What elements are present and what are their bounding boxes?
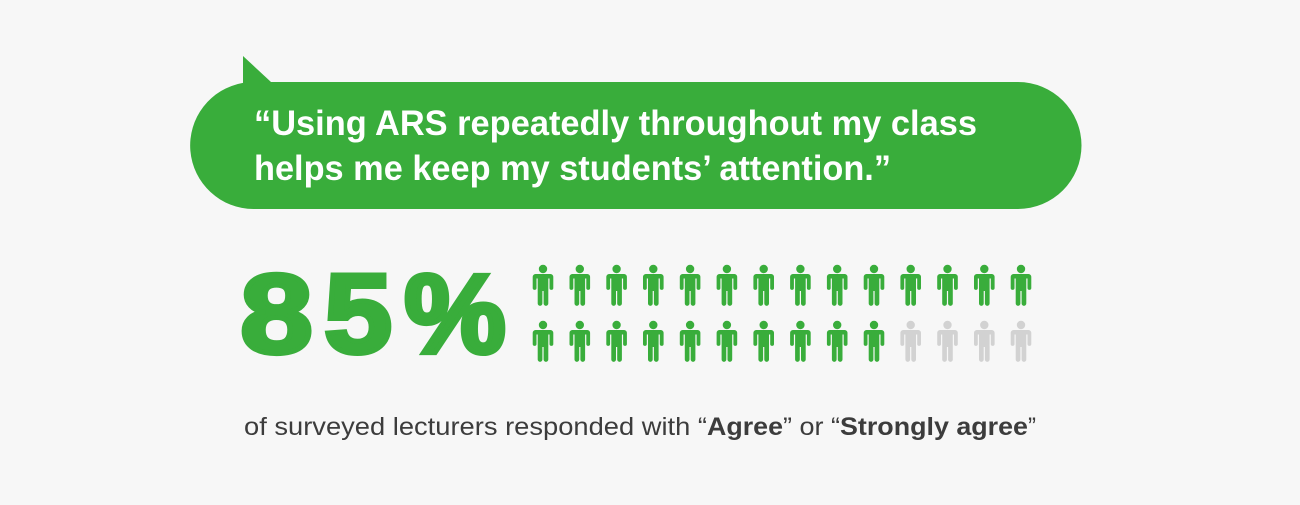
pictogram: 24 of 28 people highlighted xyxy=(533,265,1031,362)
caption: Agree xyxy=(707,413,783,441)
big percentage xyxy=(240,251,506,377)
quote text: “Using ARS repeatedly throughout my class xyxy=(254,104,977,143)
speech bubble xyxy=(190,56,1081,209)
caption: ” or “ xyxy=(783,413,840,441)
big percentage: % xyxy=(404,252,506,376)
quote text xyxy=(254,104,977,188)
row 1 people xyxy=(533,265,1031,306)
caption: of surveyed lecturers responded with “ xyxy=(244,413,707,441)
big percentage: 8 xyxy=(240,251,313,377)
row 2 green people xyxy=(533,321,884,362)
caption: ” xyxy=(1028,413,1036,441)
caption xyxy=(244,413,1036,441)
caption: Strongly agree xyxy=(840,413,1028,441)
row 2 grey people xyxy=(900,321,1031,362)
big percentage: 5 xyxy=(324,251,392,376)
quote text: helps me keep my students’ attention.” xyxy=(254,149,891,188)
